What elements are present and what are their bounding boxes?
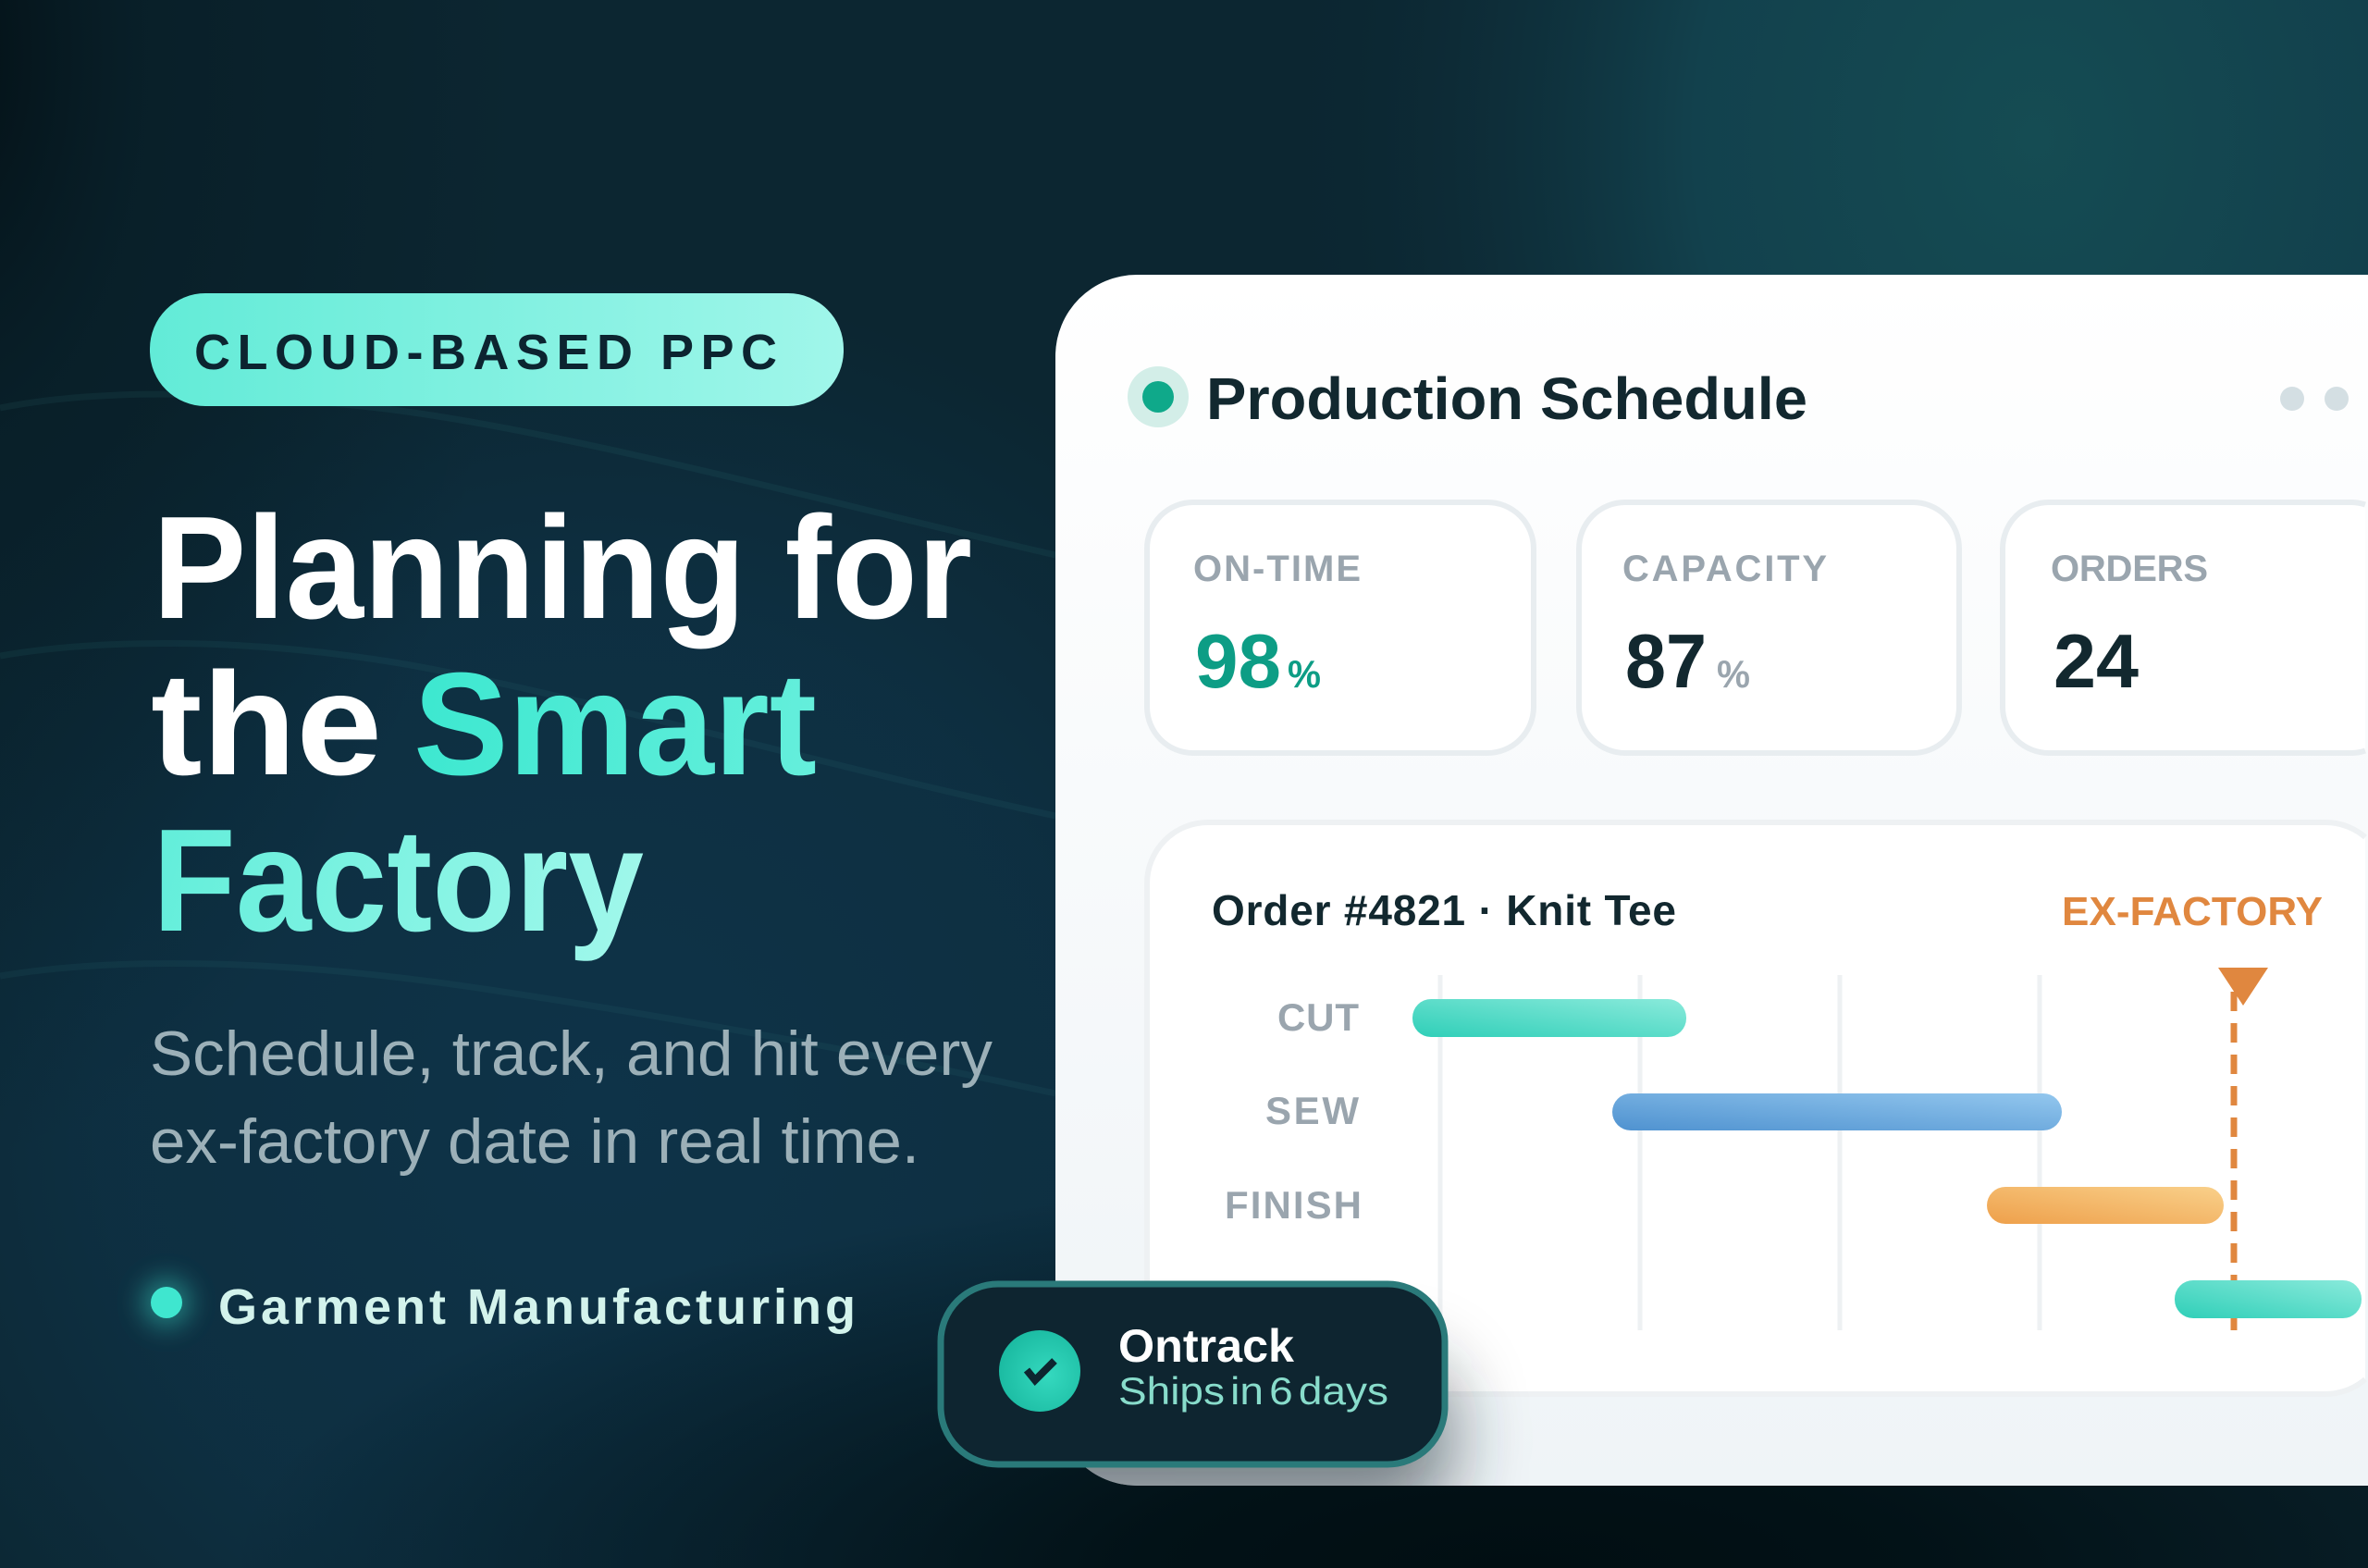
status dot <box>1128 366 1189 427</box>
title line 2: the: the <box>151 643 382 806</box>
icon: check <box>999 1330 1080 1412</box>
bar: cut <box>1412 999 1686 1037</box>
KPI: orders <box>2003 502 2365 753</box>
tag pill text: CLOUD-BASED PPC <box>194 325 777 380</box>
on-time value: 98 <box>1195 618 1281 704</box>
orders label: ORDERS <box>2051 549 2208 589</box>
ex-factory marker <box>2218 968 2268 1330</box>
badge title: Ontrack <box>1118 1320 1294 1372</box>
gantt heading: Order #4821 · Knit Tee <box>1212 886 1676 934</box>
capacity label: CAPACITY <box>1622 549 1827 589</box>
capacity value: 87 <box>1625 618 1707 704</box>
bar: ship <box>2175 1280 2362 1318</box>
status badge <box>941 1284 1445 1464</box>
badge detail: Ships in 6 days <box>1118 1369 1388 1413</box>
title line 2: Smart: Smart <box>413 643 817 806</box>
title line 1: Planning for <box>153 487 972 649</box>
ex-factory label: EX-FACTORY <box>2062 889 2323 934</box>
subtitle line 1: Schedule, track, and hit every <box>150 1019 993 1089</box>
badge shadow on card <box>1086 1327 1503 1486</box>
bar: sew <box>1612 1093 2062 1130</box>
subtitle <box>150 1019 993 1177</box>
panel: dashboard card <box>980 275 2368 1517</box>
label: sew: SEW <box>1265 1089 1359 1132</box>
label: finish: FINISH <box>1225 1183 1362 1227</box>
subtitle line 2: ex-factory date in real time. <box>150 1106 919 1177</box>
on-time label: ON-TIME <box>1193 549 1361 589</box>
capacity unit: % <box>1717 652 1750 696</box>
on-time unit: % <box>1288 652 1321 696</box>
orders value: 24 <box>2054 618 2139 704</box>
KPI: capacity <box>1579 502 1959 753</box>
KPI: on-time <box>1147 502 1534 753</box>
industry tag <box>142 1278 856 1335</box>
panel: gantt chart <box>1147 822 2365 1394</box>
tag pill <box>150 293 844 406</box>
main title <box>151 487 972 962</box>
title line 3: Factory: Factory <box>153 799 644 962</box>
window dots <box>2280 387 2349 411</box>
panel title: Production Schedule <box>1206 365 1807 432</box>
bar: finish <box>1987 1187 2224 1224</box>
label: cut: CUT <box>1277 995 1359 1039</box>
row labels <box>1225 995 1362 1227</box>
industry label: Garment Manufacturing <box>218 1279 856 1335</box>
